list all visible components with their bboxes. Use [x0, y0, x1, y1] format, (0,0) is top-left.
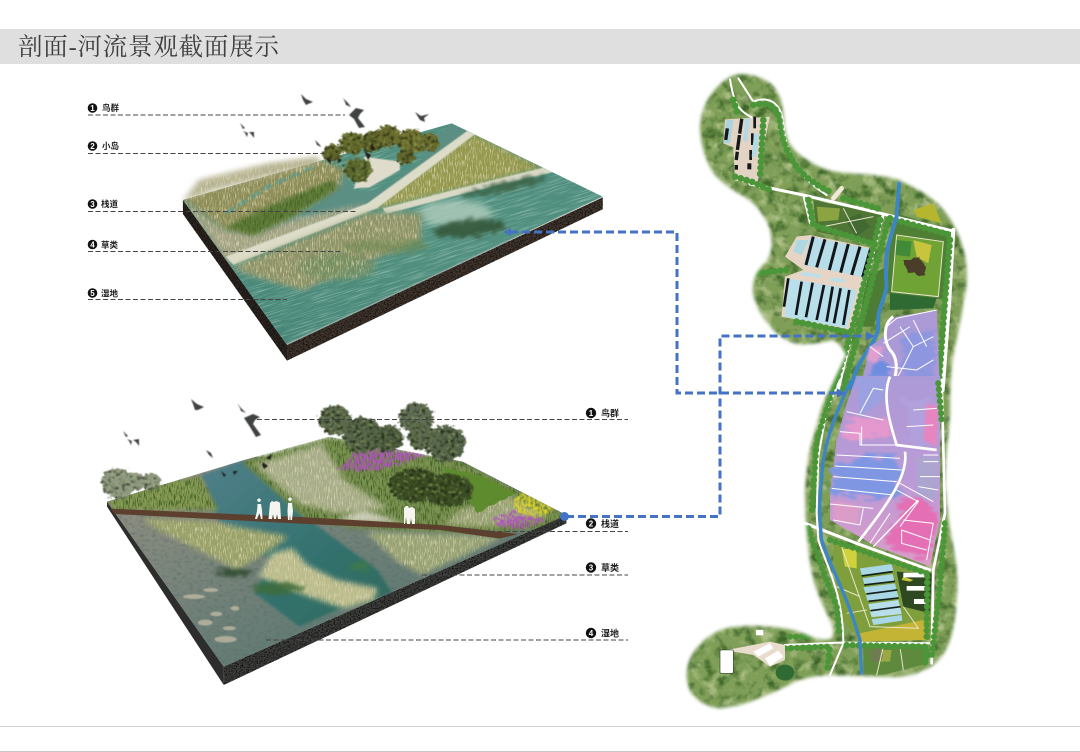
label 4 wetland: 湿地: [601, 628, 619, 638]
map base: [680, 70, 975, 715]
leader lines and labels: upper block: [88, 103, 358, 300]
small flock: [123, 431, 139, 446]
purple flowers back: [339, 446, 427, 471]
label 5 wetland: 5: [90, 289, 95, 298]
water edge strip: [287, 197, 603, 345]
block sides: [107, 502, 566, 685]
label 4 grasses: [88, 240, 340, 252]
birds over upper block: [240, 94, 429, 164]
people silhouettes on boardwalk: [255, 497, 415, 524]
label 2 island: 小岛: [102, 141, 119, 151]
label 1 birds: 鸟群: [601, 408, 619, 418]
label 3 grasses: 草类: [601, 562, 619, 573]
purple flowers front: [492, 512, 548, 529]
island trees: [322, 125, 440, 182]
map lower zone in zoom coordinates: [720, 376, 945, 681]
dark shrubs: [389, 468, 473, 507]
label 1 birds: 鸟群: [102, 103, 120, 113]
cream paths: [226, 131, 475, 265]
walker: [255, 498, 262, 519]
map mottled vegetation: [680, 70, 975, 715]
reed island: [183, 160, 346, 235]
lower tree rows: [785, 383, 945, 673]
brown garden centre: [903, 257, 927, 277]
birds over lower block: [123, 399, 272, 477]
map upper zone in zoom coordinates: [723, 78, 953, 390]
label 1 birds: 1: [90, 104, 95, 113]
bird: [315, 140, 321, 147]
label 2 island: [88, 141, 325, 154]
upper block: river landscape section: [181, 124, 603, 361]
olive meadow: [373, 133, 543, 207]
connector arrow: upper block to map: [503, 228, 846, 398]
block top surface: [183, 124, 603, 345]
label 4 wetland: [266, 628, 628, 640]
label 3 boardwalk: 栈道: [101, 199, 119, 209]
back trees: [319, 403, 466, 461]
lower white roads: [785, 380, 945, 675]
large swooping bird: [349, 108, 365, 128]
river upper: [852, 182, 899, 390]
lower reed patches: [142, 518, 503, 608]
right hill meadow: [242, 437, 566, 534]
top surface: [103, 437, 570, 670]
river: [201, 460, 392, 627]
dark birds: [221, 454, 272, 477]
label 5 wetland: [88, 288, 287, 300]
dark green reflections: [432, 216, 506, 240]
central greenhouse group upper: [782, 235, 873, 330]
bird: [301, 94, 313, 105]
footer rules: [0, 726, 1080, 752]
label 1 birds: 1: [589, 409, 594, 418]
river lower: [820, 380, 862, 675]
water: [183, 124, 603, 345]
reed band: [233, 213, 421, 290]
map: site plan: [680, 70, 975, 715]
pink farmland lower: [830, 376, 940, 567]
bird: [191, 399, 204, 410]
label 2 island: 2: [90, 142, 95, 151]
left meadow: [107, 477, 218, 511]
boardwalk: [111, 509, 518, 539]
label 2 boardwalk: 2: [589, 520, 594, 528]
large swooping bird: [244, 414, 261, 437]
label 4 grasses: 草类: [101, 240, 119, 250]
farmland plot lines: [830, 388, 940, 560]
sand highlights: [183, 588, 239, 643]
soft grass tips at back: [183, 157, 321, 202]
bird: [237, 403, 246, 413]
title: 剖面-河流景观截面展示: [18, 33, 280, 61]
leader lines and labels: lower block: [257, 408, 628, 640]
small white buildings: [903, 573, 929, 604]
dark birds in trees: [326, 143, 375, 164]
label 2 boardwalk: [475, 518, 628, 532]
sand island: [354, 157, 400, 188]
central greenhouse group lower: [784, 272, 857, 328]
park buildings: [720, 630, 794, 681]
title bar: [0, 29, 1080, 64]
label 3 boardwalk: [88, 199, 358, 212]
label 3 boardwalk: 3: [90, 200, 95, 209]
label 4 grasses: 4: [90, 240, 95, 250]
bird: [343, 98, 351, 107]
tree rows: [733, 100, 950, 390]
map light mottling: [680, 70, 975, 715]
bird: [415, 112, 429, 122]
label 1 birds: [88, 103, 345, 115]
yellow flowers: [513, 491, 556, 517]
pair of people: [404, 506, 415, 524]
label 3 grasses: 3: [589, 564, 594, 572]
sandy wetland: [103, 457, 570, 670]
label 5 wetland: 湿地: [101, 288, 119, 298]
bottom greenhouses: [860, 564, 902, 625]
small bird flock: [240, 123, 254, 138]
label 3 grasses: [422, 562, 628, 575]
pale left bank: [183, 200, 367, 263]
standing figure: [288, 497, 293, 520]
field plots: [813, 200, 950, 327]
bottom field plots: [833, 543, 932, 675]
pale water glow: [419, 200, 492, 227]
group of people: [268, 501, 281, 519]
label 4 wetland: 4: [589, 629, 594, 638]
main white roads: [730, 78, 953, 390]
top greenhouse group: [723, 117, 770, 184]
back channel: [296, 124, 474, 216]
label 2 boardwalk: 栈道: [601, 518, 619, 529]
left trees: [101, 468, 161, 499]
block soil sides: [183, 197, 603, 361]
lower block: river and wetland section: [101, 403, 570, 685]
pink farmland upper: [863, 310, 940, 376]
bird: [206, 450, 213, 458]
label 1 birds: [257, 408, 628, 420]
connector arrow: lower block to map: [560, 332, 875, 521]
